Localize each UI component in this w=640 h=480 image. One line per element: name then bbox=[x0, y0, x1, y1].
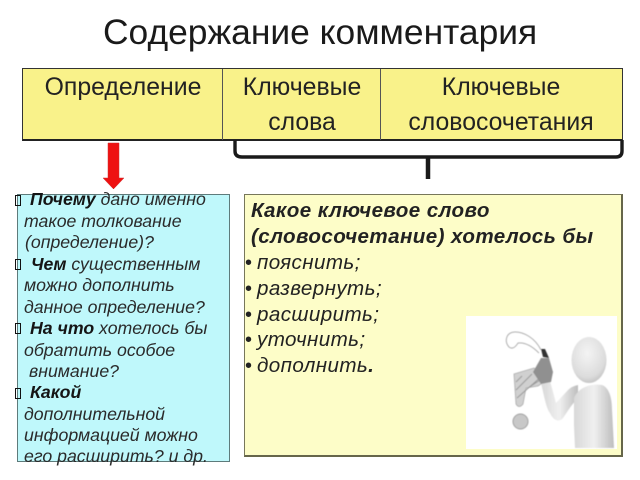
cell: keywords bbox=[243, 74, 361, 136]
questions text: данное определение? bbox=[24, 297, 205, 317]
questions text: дополнительной bbox=[24, 404, 165, 424]
cell: definition: Определение bbox=[45, 74, 201, 101]
bullet list: пояснить; bbox=[257, 251, 361, 274]
arm bbox=[541, 381, 578, 420]
cell: keywords: Ключевые bbox=[243, 74, 361, 101]
bracket bbox=[233, 140, 624, 179]
panel text bbox=[245, 199, 594, 377]
questions text: его расширить? и др. bbox=[24, 446, 208, 466]
table: comment parts bbox=[22, 68, 623, 141]
questions text: такое толкование bbox=[24, 211, 182, 231]
panel: questions bbox=[17, 194, 230, 462]
arrow: red down bbox=[103, 142, 124, 189]
cell: keywords: слова bbox=[268, 109, 336, 136]
cell: key phrases: словосочетания bbox=[408, 109, 594, 136]
questions text: внимание? bbox=[29, 361, 119, 381]
bullet list: уточнить; bbox=[257, 328, 366, 351]
question 3: На что хотелось бы bbox=[30, 318, 207, 338]
bullet list: • bbox=[245, 304, 252, 326]
head bbox=[572, 337, 606, 383]
bullet list: развернуть; bbox=[257, 277, 382, 300]
question mark hatched stem bbox=[514, 368, 550, 406]
heading: Какое ключевое слово bbox=[251, 199, 490, 222]
bullet list: • bbox=[245, 329, 252, 351]
bullet list: расширить; bbox=[257, 303, 379, 326]
question 1: Почему дано именно bbox=[30, 189, 206, 209]
bullet list bbox=[245, 251, 382, 377]
panel text: (словосочетание) хотелось бы bbox=[251, 225, 594, 248]
bullet list: • bbox=[245, 252, 252, 274]
questions text: можно дополнить bbox=[24, 275, 175, 295]
question mark dot bbox=[513, 414, 528, 429]
cell: key phrases: Ключевые bbox=[442, 74, 560, 101]
questions text: информацией можно bbox=[24, 425, 198, 445]
illustration: figure with question mark bbox=[466, 316, 617, 449]
bullet list: • bbox=[245, 355, 252, 377]
hand and pen bbox=[533, 358, 553, 384]
bullet list: дополнить. bbox=[257, 354, 374, 377]
question 2: Чем существенным bbox=[31, 254, 200, 274]
torso bbox=[574, 385, 614, 448]
questions text: обратить особое bbox=[24, 340, 175, 360]
question mark outline bbox=[506, 332, 541, 353]
bullet list: • bbox=[245, 278, 252, 300]
title: Содержание комментария bbox=[103, 12, 537, 52]
cell: key phrases bbox=[408, 74, 594, 136]
question 4: Какой bbox=[30, 382, 81, 402]
panel: key phrases questions bbox=[244, 194, 623, 457]
questions text bbox=[15, 189, 208, 466]
questions text: (определение)? bbox=[25, 232, 154, 252]
